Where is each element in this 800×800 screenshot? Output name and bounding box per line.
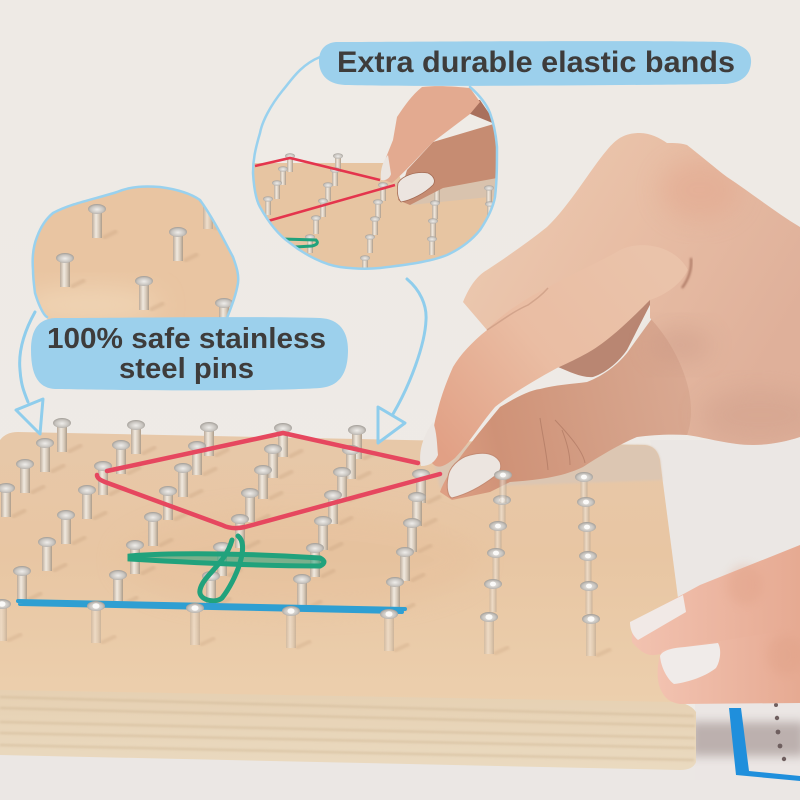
main hand — [420, 133, 800, 500]
inset large pins — [56, 201, 232, 318]
upper nail — [630, 595, 686, 640]
stainless steel pins on board — [0, 418, 598, 614]
geoboard top surface — [0, 432, 690, 702]
label: extra durable elastic bands: Extra durable elastic bands — [337, 46, 735, 79]
lower nail — [660, 643, 720, 684]
table surface at right — [0, 440, 800, 800]
thumb creases — [540, 418, 585, 470]
thumb — [440, 317, 760, 500]
knuckle crease — [682, 258, 691, 288]
label: 100% safe stainless steel pins — [31, 317, 348, 390]
inset thumb nail — [397, 173, 434, 202]
lower finger — [658, 628, 800, 704]
inset thumb — [398, 123, 497, 205]
pin in front of thumb nail — [494, 470, 512, 503]
inset outline — [253, 57, 497, 269]
thumb nail — [447, 453, 501, 498]
hand shading — [664, 164, 780, 420]
callout: stainless steel pins zoomed inset — [31, 185, 240, 320]
inset outline — [33, 187, 238, 318]
index finger — [432, 245, 688, 467]
arrow: left callout to board — [16, 312, 43, 434]
label: 100% safe stainless steel pins: 100% safe stainless — [47, 323, 326, 355]
inset index finger — [384, 86, 480, 183]
red elastic band — [97, 433, 440, 528]
blue elastic band — [18, 601, 405, 612]
inset board — [254, 163, 494, 268]
back of hand — [463, 133, 800, 445]
middle finger behind — [558, 295, 655, 377]
inset middle finger — [470, 100, 492, 123]
upper knuckle shade — [727, 565, 763, 605]
label: extra durable elastic bands — [319, 41, 751, 86]
inset pins — [263, 153, 495, 274]
callout: elastic bands zoomed inset — [250, 57, 500, 275]
inset wood — [34, 188, 237, 320]
green elastic band — [130, 536, 324, 601]
arrow: top callout to board — [378, 279, 426, 443]
inset red band — [255, 158, 395, 221]
worksheet paper with blue frame — [690, 703, 800, 781]
inset index nail — [381, 155, 391, 180]
inset green band — [282, 239, 317, 247]
lower right fingers — [630, 545, 800, 704]
upper finger — [632, 545, 800, 655]
lower knuckle shade — [767, 635, 800, 675]
geoboard front laminate edge — [0, 688, 696, 770]
label: 100% safe stainless steel pins: steel pins — [119, 353, 254, 385]
index nail — [420, 422, 438, 466]
inset background — [250, 60, 500, 275]
index crease — [487, 288, 548, 330]
front row pins — [0, 599, 611, 656]
